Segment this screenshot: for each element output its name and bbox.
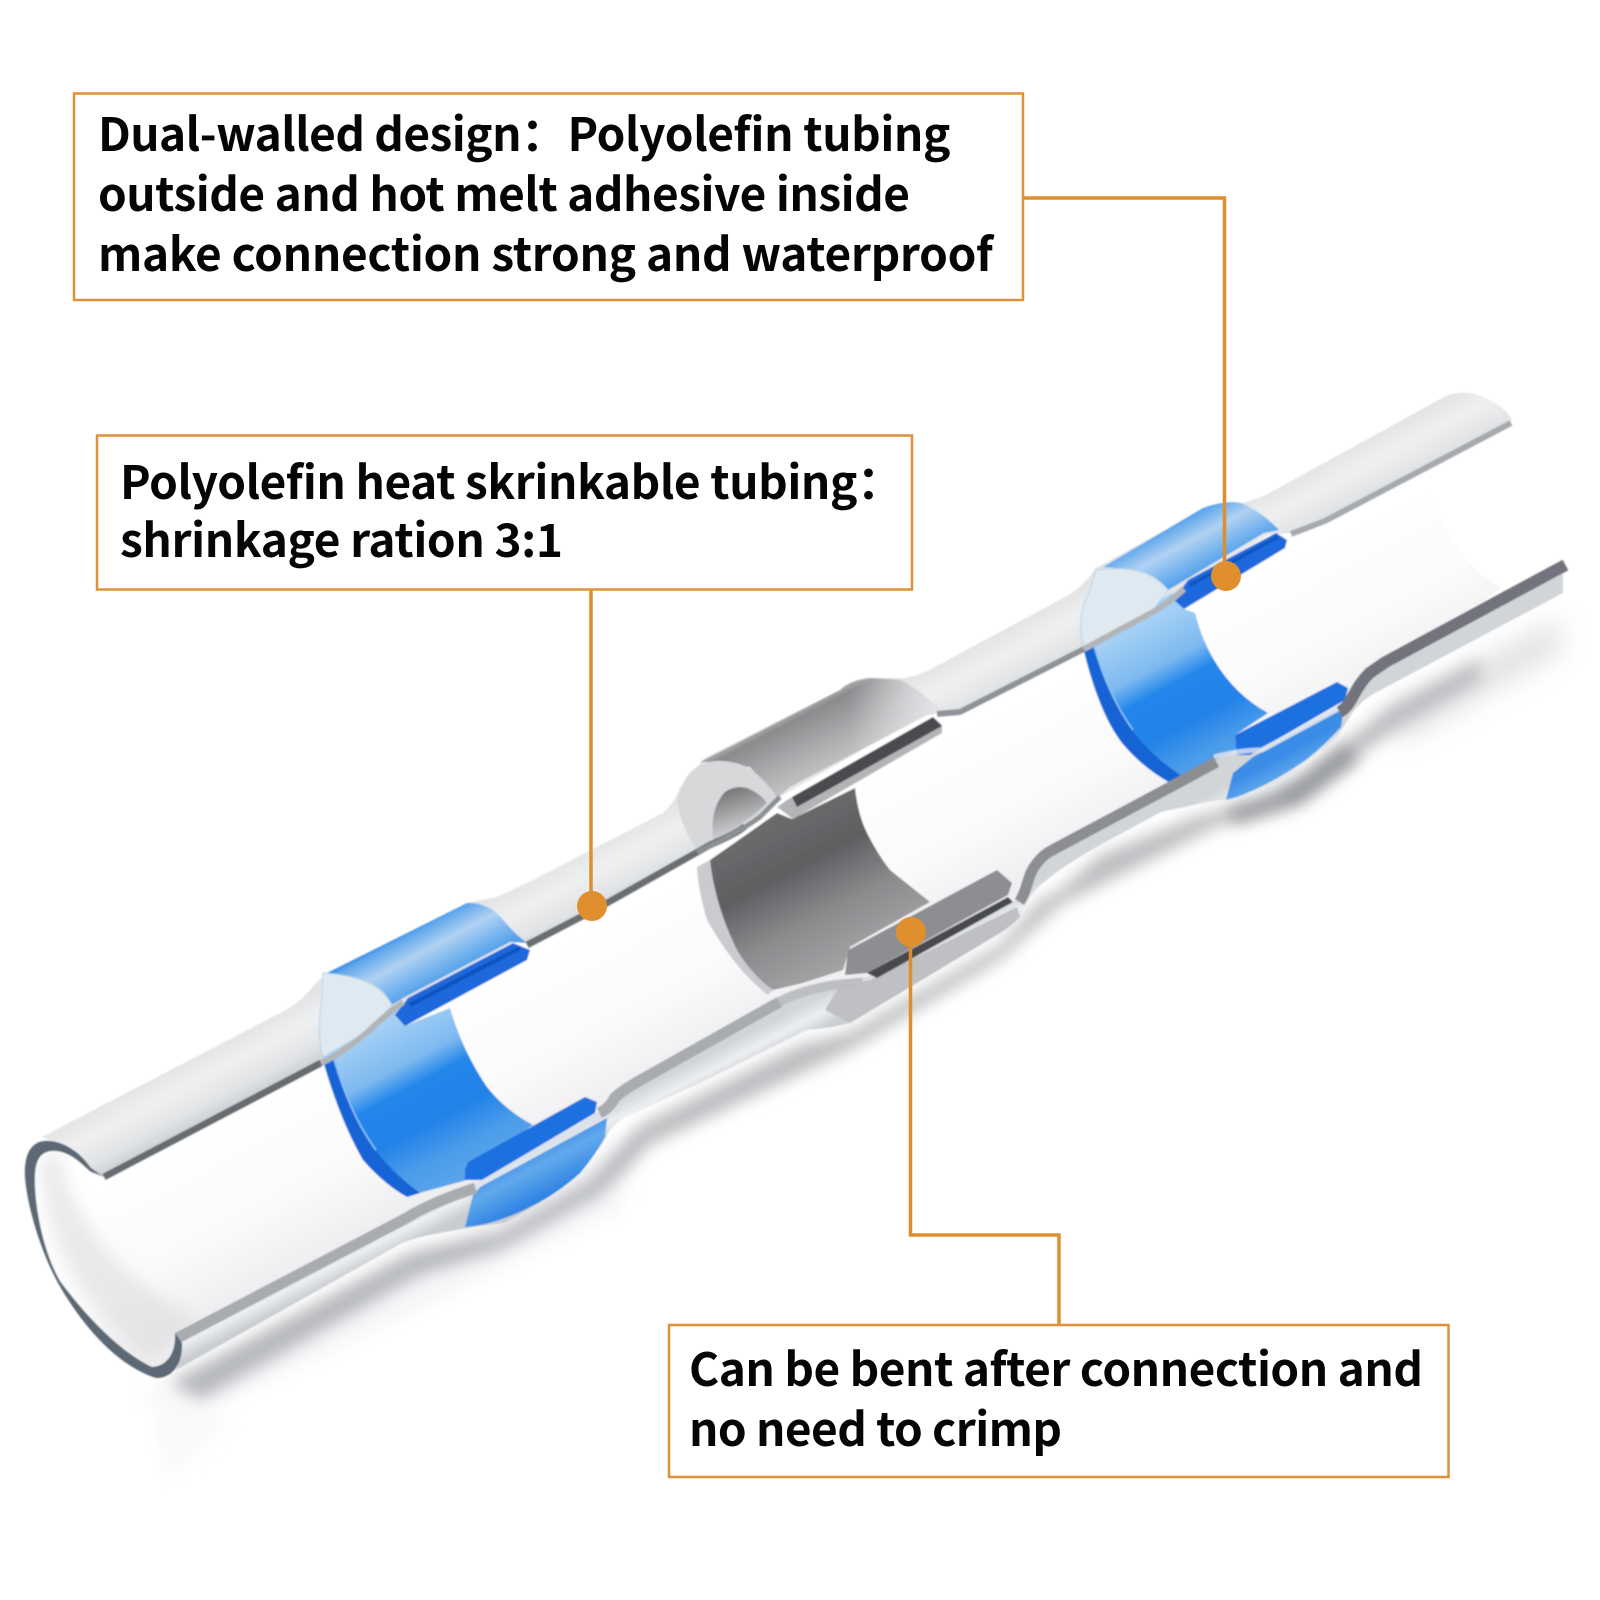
callout box: dual-walled design: Polyolefin tubing	[568, 99, 950, 165]
blue inner sleeve	[1084, 593, 1268, 782]
metal outer upper	[700, 678, 940, 798]
callout box: dual-walled design: outside and hot melt adhesive inside	[98, 159, 910, 225]
upper blue tab	[395, 943, 530, 1026]
left rim	[25, 1141, 182, 1378]
callout line: dual-walled	[1023, 198, 1224, 576]
ring face	[677, 761, 777, 850]
right blue band	[1081, 502, 1348, 800]
blue outer lower	[465, 1118, 607, 1227]
callout dot: metal	[896, 917, 926, 947]
lower blue tab	[465, 1097, 597, 1180]
glass ring	[1081, 569, 1168, 647]
grey middle band	[677, 678, 1020, 1023]
callout box: dual-walled design: Dual-walled design：	[98, 99, 567, 165]
lower cut edge	[178, 565, 1566, 1338]
cable connector tube illustration	[25, 393, 1565, 1378]
callout line: polyolefin	[589, 589, 593, 906]
blue outer lower	[1226, 707, 1344, 800]
lower tube wall	[175, 560, 1563, 1370]
rim highlight	[333, 1056, 376, 1150]
callout dot: tube	[577, 891, 607, 921]
lower lip over blue band	[437, 1114, 600, 1200]
callout box: bendable	[669, 1325, 1448, 1477]
glass ring	[319, 973, 392, 1057]
blue sleeve rim	[1084, 645, 1182, 782]
lower lip over blue band	[1214, 708, 1340, 757]
reflection and shadow under tube	[143, 620, 1560, 1480]
soft grey shade inside left opening	[40, 1150, 200, 1360]
blue inner sleeve	[323, 1002, 533, 1197]
callout dot: blue tab	[1211, 561, 1241, 591]
blue outer upper	[327, 903, 527, 1005]
ring hole	[712, 787, 767, 842]
upper tab highlight	[410, 948, 520, 1005]
blue sleeve rim	[323, 1055, 420, 1197]
tube interior	[33, 467, 1501, 1370]
metal outer lower	[825, 907, 1020, 1023]
lower metal tab	[845, 870, 1013, 978]
blue outer upper	[1103, 502, 1279, 590]
upper cut edge	[104, 423, 1511, 1177]
callout box: polyolefin tubing	[97, 436, 912, 590]
callout box: polyolefin tubing: shrinkage ration 3:1	[120, 505, 563, 571]
callout line: bent	[910, 932, 1059, 1325]
rim highlight	[1094, 646, 1133, 730]
callout box: bendable: Can be bent after connection and	[689, 1334, 1423, 1400]
callout box: dual-walled design	[74, 94, 1023, 300]
callout box: dual-walled design: make connection strong and waterproof	[98, 219, 995, 285]
callout box: polyolefin tubing: Polyolefin heat skrinkable tubing：	[120, 447, 903, 513]
callout box: bendable: no need to crimp	[689, 1394, 1062, 1460]
metal sleeve rim	[697, 860, 773, 995]
upper blue tab	[1174, 533, 1287, 609]
left blue band	[319, 903, 607, 1227]
upper tube wall	[42, 393, 1511, 1177]
upper metal tab	[777, 717, 942, 819]
metal fade	[850, 678, 940, 757]
metal inner sleeve	[710, 788, 930, 990]
upper tab highlight	[1190, 537, 1278, 585]
lower blue tab	[1235, 682, 1348, 755]
